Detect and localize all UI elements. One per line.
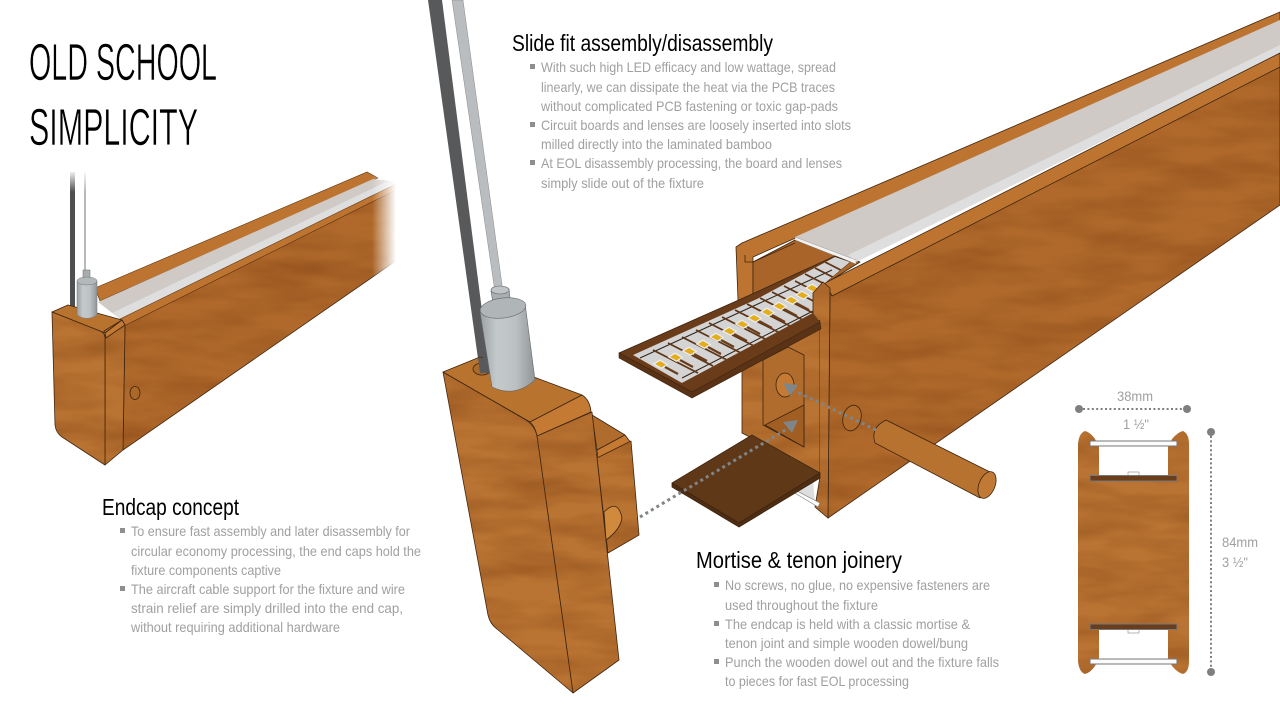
dowel hole in side face xyxy=(840,403,864,433)
fixture lens and rails xyxy=(95,172,400,326)
bullets: mortise and tenon: Punch the wooden dowel out and the fixture falls xyxy=(725,654,999,670)
lower board xyxy=(1090,624,1177,633)
icon: light cable xyxy=(452,0,503,292)
strain relief cylinder xyxy=(479,286,535,391)
upper circuit board xyxy=(619,256,870,392)
text block: endcap concept xyxy=(102,494,421,635)
tenon xyxy=(592,415,639,553)
strain relief cylinder xyxy=(77,270,97,318)
upper board xyxy=(1090,472,1177,481)
width dimension: 1 ½" xyxy=(1123,416,1149,432)
fixture side face xyxy=(828,66,1280,518)
icon: dark cable xyxy=(428,0,490,373)
bullets: endcap concept: strain relief are simply drilled into the end cap, xyxy=(131,600,403,616)
end cap front face xyxy=(443,372,573,693)
bullets: slide fit: With such high LED efficacy and low wattage, spread xyxy=(541,59,836,75)
text block: slide fit xyxy=(512,30,851,191)
inner far wall xyxy=(753,240,860,300)
main fixture illustration xyxy=(619,12,1280,527)
bullets: slide fit xyxy=(530,59,851,191)
circuit traces xyxy=(640,262,842,378)
width dimension: 38mm xyxy=(1117,388,1153,404)
lower circuit board xyxy=(672,435,820,527)
bullets: endcap concept xyxy=(120,523,421,635)
bullets: endcap concept: The aircraft cable support for the fixture and wire xyxy=(131,581,405,597)
lower lens xyxy=(1090,659,1177,664)
bullets: slide fit: At EOL disassembly processing, the board and lenses xyxy=(541,155,842,171)
section body xyxy=(1078,431,1189,674)
heading: slide fit: Slide fit assembly/disassembly xyxy=(512,30,773,56)
bullets: mortise and tenon: No screws, no glue, no expensive fasteners are xyxy=(725,577,990,593)
bullets: endcap concept: To ensure fast assembly and later disassembly for xyxy=(131,523,410,539)
bullets: slide fit: simply slide out of the fixture xyxy=(541,175,704,191)
height dimension: 84mm xyxy=(1222,534,1258,550)
fixture side face xyxy=(123,186,400,450)
bullets: mortise and tenon xyxy=(714,577,999,689)
bullets: mortise and tenon: The endcap is held with a classic mortise & xyxy=(725,616,971,632)
near rail xyxy=(825,53,1280,296)
bullets: mortise and tenon: used throughout the fixture xyxy=(725,597,878,613)
bullets: mortise and tenon: to pieces for fast EOL processing xyxy=(725,673,909,689)
bullets: slide fit: milled directly into the laminated bamboo xyxy=(541,136,772,152)
lower window xyxy=(1099,630,1168,664)
wooden dowel xyxy=(874,420,1000,501)
bullets: endcap concept: fixture components captive xyxy=(131,562,281,578)
lower lens piece xyxy=(793,480,820,507)
small assembled fixture illustration xyxy=(52,160,400,465)
lens slot xyxy=(745,243,795,262)
title: OLD SCHOOL xyxy=(29,34,217,92)
bullets: endcap concept: without requiring additional hardware xyxy=(130,619,340,635)
cable stub xyxy=(478,358,490,373)
upper window xyxy=(1099,441,1168,475)
lens xyxy=(795,20,1280,264)
bullets: slide fit: Circuit boards and lenses are loosely inserted into slots xyxy=(541,117,851,133)
title xyxy=(29,34,217,157)
LED row xyxy=(655,285,818,368)
heading: mortise and tenon: Mortise & tenon joinery xyxy=(696,547,902,573)
cable hole xyxy=(473,363,491,375)
dotted assembly arrows xyxy=(640,383,876,517)
far rail and far wall xyxy=(736,12,1280,300)
bullets: slide fit: linearly, we can dissipate the heat via the PCB traces xyxy=(541,79,835,95)
end cap side face xyxy=(537,412,619,693)
text block: mortise and tenon xyxy=(696,547,999,689)
width dimension xyxy=(1075,388,1191,432)
exploded end cap illustration xyxy=(428,0,639,693)
title: SIMPLICITY xyxy=(29,99,198,157)
end cap top face xyxy=(443,357,582,422)
end cap rounded edge xyxy=(530,395,591,436)
heading: endcap concept: Endcap concept xyxy=(102,494,240,520)
dowel hole xyxy=(130,386,140,400)
bullets: slide fit: without complicated PCB fastening or toxic gap-pads xyxy=(540,98,838,114)
height dimension: 3 ½" xyxy=(1222,554,1248,570)
cross-section diagram xyxy=(1078,431,1189,674)
icon: suspension cables xyxy=(68,170,90,312)
fade xyxy=(372,160,396,285)
height dimension xyxy=(1207,428,1258,676)
end cap xyxy=(52,305,125,465)
end face body with mortise xyxy=(742,300,820,473)
bullets: mortise and tenon: tenon joint and simple wooden dowel/bung xyxy=(725,635,968,651)
bullets: endcap concept: circular economy processing, the end caps hold the xyxy=(131,543,421,559)
mortise recess xyxy=(763,347,804,447)
upper board lip xyxy=(619,313,821,398)
near wall column xyxy=(813,282,830,518)
upper lens xyxy=(1090,441,1177,446)
